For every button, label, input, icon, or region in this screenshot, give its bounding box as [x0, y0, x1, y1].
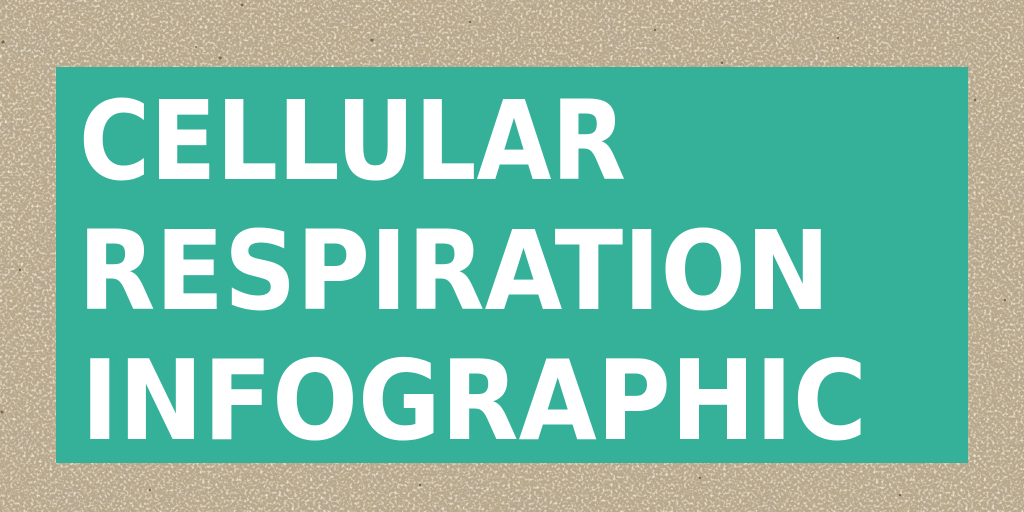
title line: CELLULAR: CELLULAR — [79, 77, 626, 205]
title line: RESPIRATION: RESPIRATION — [78, 207, 830, 335]
title line: INFOGRAPHIC: INFOGRAPHIC — [81, 337, 867, 466]
